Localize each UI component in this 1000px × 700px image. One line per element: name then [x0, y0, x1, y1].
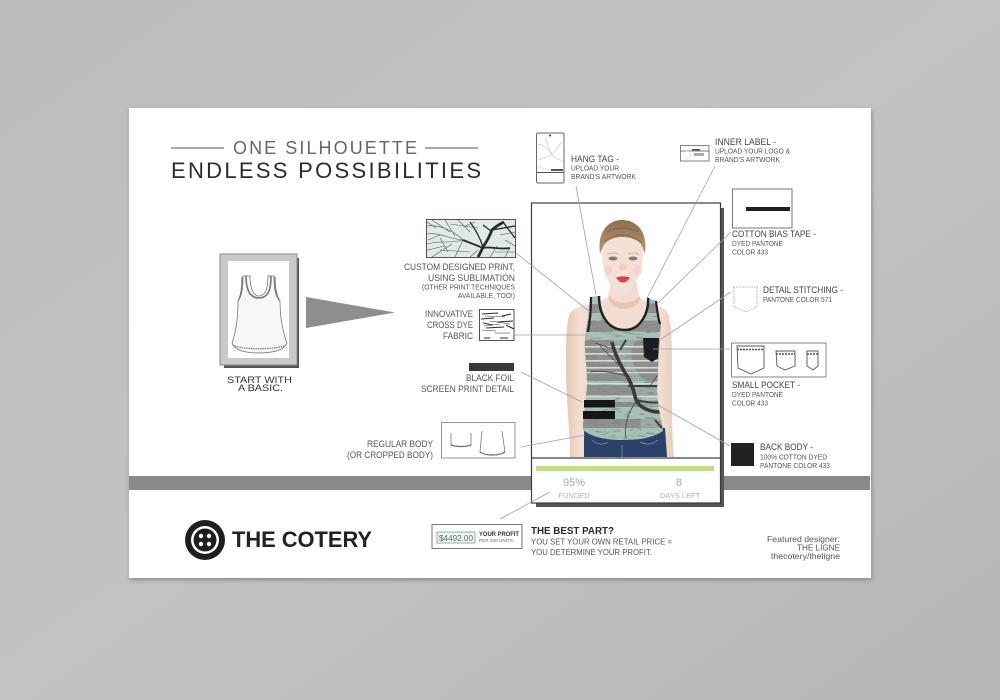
- callout: custom designed print: CUSTOM DESIGNED PRINT,: [404, 262, 515, 272]
- leader lines: [500, 166, 731, 519]
- text block: the best part: YOU SET YOUR OWN RETAIL PRICE =: [531, 536, 672, 546]
- stat: 8 days left: 8: [676, 477, 682, 489]
- callout: hang tag: HANG TAG -: [571, 154, 619, 165]
- callout: cross dye fabric: CROSS DYE: [427, 320, 473, 330]
- logo: the cotery: [185, 520, 372, 560]
- callout: back body: PANTONE COLOR 433: [760, 461, 830, 470]
- text block: featured designer: [767, 534, 840, 561]
- print mottling: [584, 296, 662, 440]
- gray stripes: [583, 304, 662, 428]
- text block: the best part: THE BEST PART?: [531, 525, 614, 537]
- title: [171, 138, 481, 183]
- text block: the best part: [531, 525, 672, 557]
- callout: custom designed print: [404, 220, 516, 300]
- callout: cross dye fabric: [425, 309, 514, 341]
- title: ONE SILHOUETTE: [233, 138, 417, 158]
- icon: basic tank outline: [232, 276, 287, 353]
- callout: detail stitching: PANTONE COLOR 571: [763, 295, 832, 304]
- callout: cross dye fabric: INNOVATIVE: [425, 309, 473, 319]
- callout: black foil: [421, 363, 514, 394]
- callout: back body: 100% COTTON DYED: [760, 452, 828, 462]
- text block: the best part: YOU DETERMINE YOUR PROFIT.: [531, 547, 652, 557]
- callout: back body: [731, 442, 830, 470]
- stat: 8 days left: [660, 477, 701, 500]
- photo: model wearing tank: [566, 220, 674, 457]
- callout: regular body: (OR CROPPED BODY): [347, 450, 433, 460]
- profit widget: $4492.00: [439, 533, 473, 543]
- mint ribbon: [613, 330, 662, 440]
- callout: inner label: UPLOAD YOUR LOGO &: [715, 146, 790, 156]
- icon: back body swatch: [731, 443, 754, 466]
- callout: small pocket: [732, 343, 826, 408]
- callout: cotton bias tape: COTTON BIAS TAPE -: [732, 229, 816, 240]
- panel: product photo and funding card: [532, 203, 724, 507]
- callout: small pocket: SMALL POCKET -: [732, 380, 800, 391]
- callout: regular body: REGULAR BODY: [367, 439, 433, 449]
- title: ENDLESS POSSIBILITIES: [171, 158, 481, 183]
- icon: bias tape swatch: [732, 189, 792, 228]
- callout: custom designed print: AVAILABLE, TOO!): [458, 293, 515, 300]
- callout: hang tag: UPLOAD YOUR: [571, 164, 620, 172]
- icon: foil swatch: [469, 363, 514, 371]
- callout: inner label: [680, 137, 790, 164]
- grey horizontal band: [129, 476, 870, 490]
- icon: cross dye swatch: [480, 310, 514, 340]
- text block: featured designer: thecotery/theligne: [771, 551, 840, 561]
- progress bar: [536, 466, 714, 471]
- poster sheet: [129, 108, 872, 580]
- callout: hang tag: BRAND'S ARTWORK: [571, 172, 636, 181]
- profit widget: PER 200 UNITS: [479, 538, 513, 543]
- panel: start with a basic: [220, 254, 299, 394]
- caption: start with a basic: START WITH: [227, 375, 292, 386]
- callout: inner label: INNER LABEL -: [715, 137, 776, 148]
- callout: cotton bias tape: COLOR 433: [732, 248, 768, 256]
- callout: custom designed print: (OTHER PRINT TECHNIQUES: [422, 284, 515, 292]
- callout: custom designed print: USING SUBLIMATION: [428, 273, 515, 283]
- callout: black foil: BLACK FOIL: [466, 373, 514, 383]
- stat: 95% funded: [558, 477, 590, 500]
- stat: 95% funded: FUNDED: [558, 491, 590, 500]
- logo: the cotery: THE COTERY: [232, 527, 372, 552]
- profit widget: [432, 524, 522, 548]
- callout: small pocket: COLOR 433: [732, 398, 768, 408]
- callout: cotton bias tape: [732, 189, 816, 256]
- callout: inner label: BRAND'S ARTWORK: [715, 155, 780, 164]
- callout: back body: BACK BODY -: [760, 442, 813, 453]
- callout: cotton bias tape: DYED PANTONE: [732, 239, 783, 248]
- icon: pocket shapes: [732, 343, 826, 377]
- stat: 95% funded: 95%: [563, 477, 585, 489]
- stat: 8 days left: DAYS LEFT: [660, 491, 701, 500]
- icon: body lengths: [442, 422, 515, 458]
- callout: detail stitching: DETAIL STITCHING -: [763, 285, 843, 296]
- callout: cross dye fabric: FABRIC: [443, 331, 473, 341]
- icon: button mark: [185, 520, 225, 560]
- profit widget: YOUR PROFIT: [479, 531, 519, 538]
- icon: hang tag: [536, 133, 564, 183]
- callout: black foil: SCREEN PRINT DETAIL: [421, 384, 514, 394]
- text block: featured designer: THE LIGNE: [797, 542, 840, 552]
- callout: hang tag: [536, 133, 636, 183]
- icon: tree print swatch: [426, 220, 516, 258]
- callout: regular body: [347, 422, 515, 460]
- icon: stitched pocket: [733, 287, 758, 312]
- icon: inner label: [680, 146, 709, 161]
- callout: small pocket: DYED PANTONE: [732, 390, 783, 399]
- arrow: basic to finished tank: [306, 297, 395, 328]
- text block: featured designer: Featured designer:: [767, 534, 840, 544]
- caption: start with a basic: A BASIC.: [238, 383, 283, 394]
- callout: detail stitching: [733, 285, 843, 312]
